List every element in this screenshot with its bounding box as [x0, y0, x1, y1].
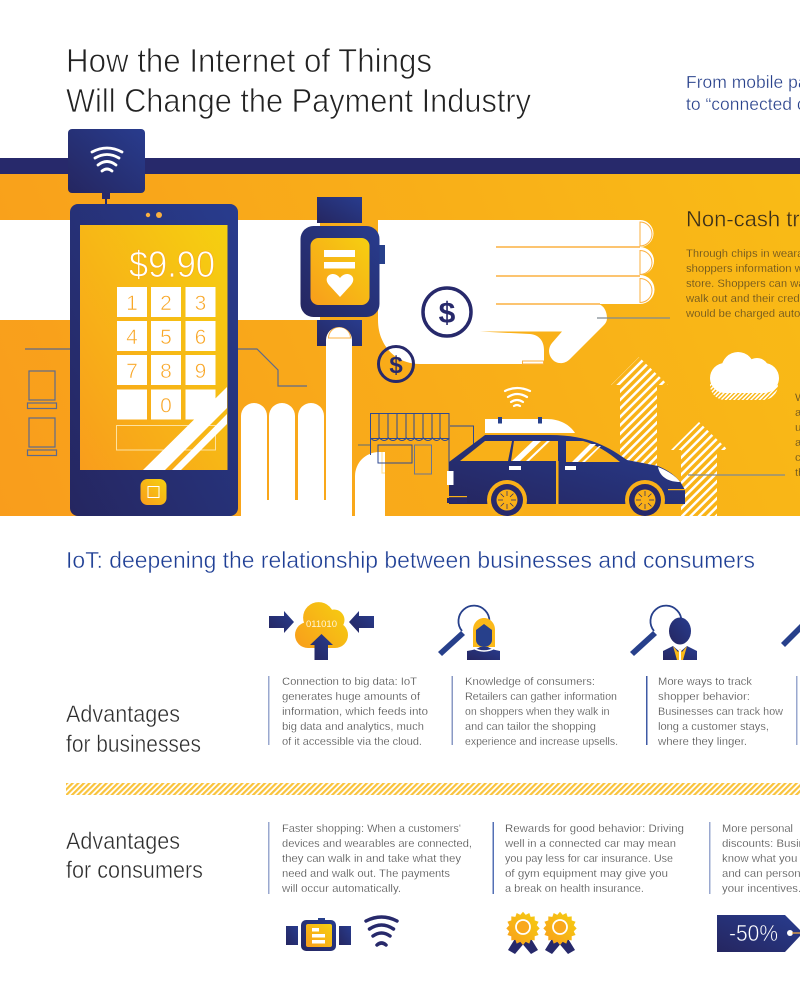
icon: reward badge one [506, 912, 540, 954]
subtitle [686, 72, 800, 114]
keypad: 9 [195, 360, 206, 383]
text: knowledge of consumers: experience and increase upsells. [465, 736, 618, 748]
icon: partial magnifier [781, 624, 800, 647]
callout line [597, 317, 670, 319]
text: more personal discounts: your incentives. [722, 883, 800, 895]
icon: wifi [366, 917, 397, 945]
white band [0, 220, 320, 320]
keypad: 7 [126, 360, 138, 383]
icon: small dollar coin [378, 346, 414, 382]
icon: large dollar coin [423, 288, 471, 336]
icon: car wifi signal [505, 388, 530, 406]
text: rewards for good behavior: a break on health insurance. [505, 883, 644, 895]
icon: small dollar coin: $ [389, 352, 403, 379]
icon: discount tag: -50% [729, 920, 778, 946]
label: advantages for consumers [66, 828, 203, 884]
navy top bar [0, 158, 800, 174]
label: advantages for consumers: for consumers [66, 857, 203, 884]
keypad: 8 [160, 360, 172, 383]
text: connection to big data: generates huge amounts of [282, 691, 421, 703]
callout text: non-cash transactions [685, 248, 800, 320]
text: knowledge of consumers: and can tailor the shopping [465, 721, 596, 733]
storefront [358, 414, 474, 480]
text: faster shopping: need and walk out. The payments [282, 868, 450, 880]
text: more ways to track: Businesses can track how [658, 706, 784, 718]
text: faster shopping [268, 822, 472, 895]
text: rewards for good behavior: Rewards for good behavior: Driving [505, 823, 684, 835]
white cover below wheels [0, 516, 800, 522]
label: advantages for businesses [66, 701, 201, 758]
hatched divider band [66, 783, 800, 795]
text: knowledge of consumers [452, 676, 618, 748]
callout line [688, 474, 785, 476]
price: $9.90 [129, 244, 215, 285]
front wheel [625, 480, 665, 520]
keypad: 1 [126, 292, 138, 315]
text: knowledge of consumers: Retailers can gather information [465, 691, 617, 703]
text: knowledge of consumers: Knowledge of consumers: [465, 676, 595, 688]
title [66, 42, 531, 119]
window glare [512, 441, 601, 462]
icon: discount tag [717, 915, 800, 952]
icon: watch [286, 918, 351, 951]
screen glare stripes [143, 387, 227, 470]
text: more ways to track [646, 676, 784, 748]
keypad: 3 [195, 292, 206, 315]
car windows [460, 441, 620, 462]
keypad: 4 [126, 326, 138, 349]
text: more ways to track: where they linger. [657, 736, 747, 748]
hand with fingers pressing the phone [241, 327, 385, 516]
label: advantages for businesses: for businesses [66, 731, 201, 758]
icon: cloud [710, 352, 779, 400]
icon: magnifier over woman [438, 606, 500, 660]
text: more ways to track: shopper behavior: [658, 691, 750, 703]
icon: magnifier over man [630, 606, 697, 660]
input field [116, 426, 216, 450]
text: more ways to track: More ways to track [658, 676, 752, 688]
text: knowledge of consumers: on shoppers when they walk in [465, 706, 610, 718]
icon: wifi box [68, 129, 145, 205]
icon: cloud with big data arrows: 011010 [306, 619, 337, 630]
headlight [658, 467, 680, 482]
title: Will Change the Payment Industry [66, 82, 531, 119]
icon: large dollar coin: $ [439, 297, 456, 330]
icon: reward badge two [543, 912, 577, 954]
door details [556, 461, 558, 504]
text: rewards for good behavior: of gym equipment may give you [505, 868, 668, 880]
callout text: connected car [795, 392, 800, 479]
section heading: IoT: deepening the relationship between businesses and consumers [66, 547, 755, 573]
text: rewards for good behavior [492, 822, 684, 895]
text: more ways to track: long a customer stays, [658, 721, 769, 733]
keypad [117, 287, 216, 420]
white hand wearing watch [362, 220, 654, 364]
title: How the Internet of Things [66, 42, 432, 79]
text: rewards for good behavior: you pay less for car insurance. Use [505, 853, 673, 865]
keypad: 5 [160, 326, 172, 349]
connected car [447, 417, 685, 520]
text: connection to big data: Connection to big data: IoT [282, 676, 417, 688]
hero illustration panel [0, 129, 800, 522]
text: faster shopping: devices and wearables are connected, [282, 838, 472, 850]
label: advantages for consumers: Advantages [66, 828, 180, 855]
car body [449, 435, 685, 504]
phone [70, 204, 238, 516]
text: more personal discounts: More personal [722, 823, 793, 835]
text: connection to big data: big data and analytics, much [282, 721, 424, 733]
icon: heart [327, 274, 353, 297]
text: faster shopping: Faster shopping: When a customers' [282, 823, 461, 835]
text: rewards for good behavior: well in a connected car may mean [504, 838, 676, 850]
text: connection to big data: of it accessible via the cloud. [282, 736, 422, 748]
keypad: 6 [195, 326, 206, 349]
roof box [485, 419, 575, 433]
text: connection to big data: information, which feeds into [282, 706, 428, 718]
column divider [796, 676, 798, 745]
home button [140, 479, 166, 505]
smartwatch [300, 197, 385, 346]
icon: striped up arrows [611, 357, 728, 516]
text: faster shopping: they can walk in and take what they [282, 853, 461, 865]
left laptops and connector lines [25, 349, 307, 456]
text: more personal discounts [709, 822, 800, 895]
rear wheel [487, 480, 527, 520]
icon: cloud with big data arrows [269, 602, 374, 660]
keypad: 0 [160, 394, 172, 418]
text: connection to big data [268, 676, 428, 748]
text: faster shopping: will occur automatically. [281, 883, 401, 895]
label: advantages for businesses: Advantages [66, 701, 180, 728]
keypad: 2 [160, 292, 172, 315]
orange background [0, 174, 800, 516]
